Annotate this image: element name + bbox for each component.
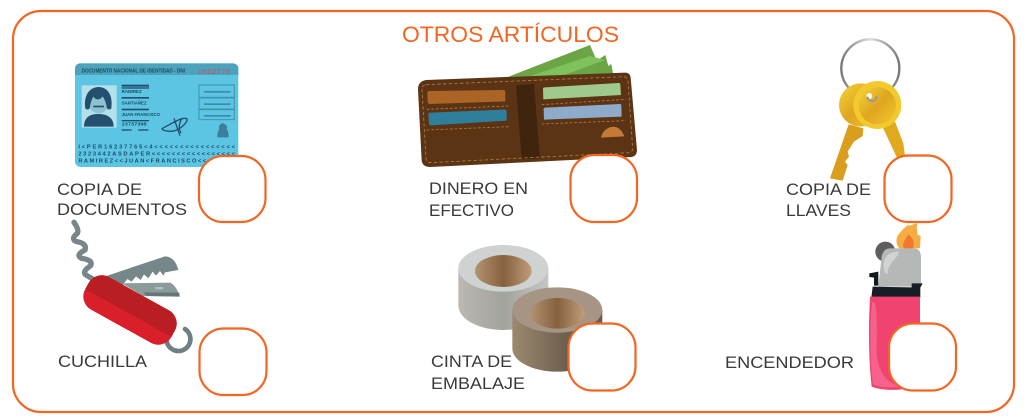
- checkbox: cuchilla: [200, 328, 266, 395]
- icon: pocket knife: [73, 222, 190, 351]
- checkbox: copia de documentos: [199, 156, 266, 222]
- icon: keys: [830, 39, 905, 181]
- icon: ID card: 2323442ASDAPER<<<<<<<<<<<<<<<<<: [78, 151, 236, 157]
- label: cinta de embalaje: CINTA DE: [431, 353, 512, 371]
- label: dinero en efectivo: EFECTIVO: [429, 202, 514, 220]
- label: cuchilla: CUCHILLA: [58, 353, 147, 371]
- title: OTROS ARTÍCULOS: [402, 22, 619, 47]
- checkbox: copia de llaves: [884, 156, 952, 222]
- icon: ID card: 23737398: [122, 122, 147, 127]
- icon: ID card: JUAN FRANCISCO: [122, 112, 161, 117]
- label: cinta de embalaje: [431, 353, 525, 393]
- label: dinero en efectivo: [429, 180, 528, 220]
- icon: wallet: [418, 45, 637, 167]
- label: copia de llaves: LLAVES: [786, 202, 851, 220]
- icon: ID card: 1522775: [197, 67, 231, 76]
- icon: ID card: RAMIREZ<<JUAN<FRANCISCO<<<<<<<<: [78, 158, 236, 164]
- label: copia de documentos: DOCUMENTOS: [57, 201, 187, 219]
- checkbox: cinta de embalaje: [568, 324, 636, 390]
- icon: ID card: DOCUMENTO NACIONAL DE IDENTIDAD - DNI: [82, 69, 185, 75]
- checkbox: dinero en efectivo: [570, 155, 637, 222]
- icon: ID card: SANTIAÑEZ: [122, 101, 147, 106]
- icon: ID card: I<PER16237765<4<<<<<<<<<<<<<<<<: [78, 144, 236, 150]
- label: encendedor: ENCENDEDOR: [725, 354, 854, 372]
- label: copia de llaves: COPIA DE: [786, 181, 871, 199]
- icon: tape rolls: [458, 245, 602, 372]
- icon: lighter: [869, 223, 923, 390]
- icon: ID card: [75, 63, 238, 167]
- icon: ID card: RAMIREZ: [122, 89, 142, 94]
- label: copia de documentos: [57, 181, 187, 219]
- label: cinta de embalaje: EMBALAJE: [431, 375, 525, 393]
- label: copia de documentos: COPIA DE: [57, 181, 142, 199]
- checkbox: encendedor: [889, 324, 956, 390]
- label: copia de llaves: [786, 181, 871, 220]
- label: dinero en efectivo: DINERO EN: [429, 180, 528, 198]
